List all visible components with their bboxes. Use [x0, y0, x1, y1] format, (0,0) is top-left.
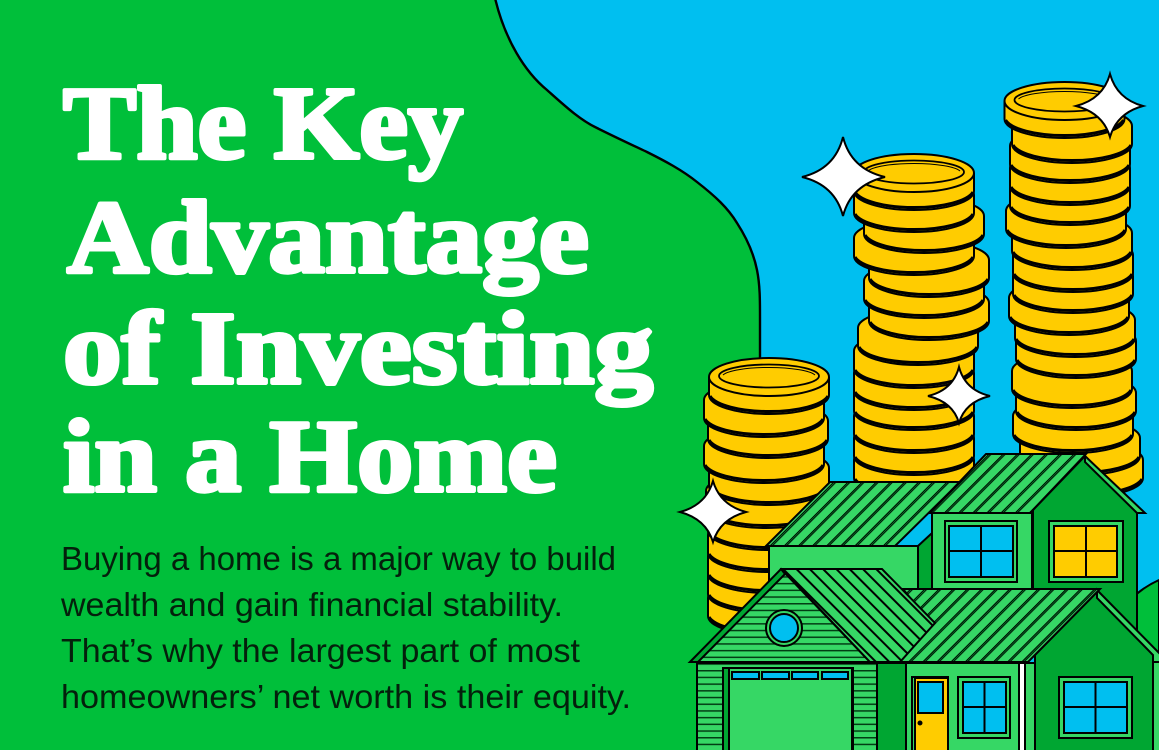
front door [912, 677, 948, 750]
intro text: wealth and gain financial stability. [60, 587, 563, 624]
lower right fascia [1097, 590, 1159, 666]
middle wall [906, 663, 1020, 750]
wing roof [766, 482, 960, 546]
upper gable wall [1033, 456, 1137, 640]
right window [1059, 677, 1132, 738]
porch post [1019, 663, 1025, 750]
garage wall siding [697, 663, 877, 750]
lower roof [900, 589, 1100, 662]
round window [766, 610, 802, 646]
icon: sparkles [680, 74, 1143, 542]
dark column [877, 663, 906, 750]
wing wall [769, 546, 918, 590]
title: in a Home [63, 399, 557, 514]
upper window blue [945, 521, 1017, 582]
garage gable siding [690, 570, 870, 662]
title: The Key [63, 66, 463, 181]
intro text [60, 541, 631, 716]
upper gable fascia [1085, 456, 1145, 513]
wing dark side [918, 533, 932, 589]
intro text: homeowners’ net worth is their equity. [61, 679, 631, 716]
intro text: Buying a home is a major way to build [61, 541, 616, 578]
garage gable fascia [690, 569, 785, 662]
lower right wall [1035, 592, 1153, 750]
title: Advantage [67, 180, 589, 295]
intro text: That’s why the largest part of most [61, 633, 581, 670]
coin stack: middle [854, 154, 989, 497]
upper roof [930, 454, 1086, 513]
coin stack: right [1004, 82, 1143, 497]
garage roof [782, 569, 935, 662]
far right wall strip [1153, 662, 1159, 750]
front window [958, 677, 1010, 738]
coin stack: left [704, 358, 829, 635]
upper wall [932, 513, 1032, 589]
upper window yellow [1049, 521, 1123, 582]
garage door [723, 668, 853, 750]
title: of Investing [63, 291, 653, 406]
title [63, 66, 653, 514]
panel: green blob background [0, 0, 760, 750]
hill: right green [1130, 580, 1159, 750]
wall strip [1025, 663, 1035, 750]
illustration: house [690, 454, 1159, 750]
